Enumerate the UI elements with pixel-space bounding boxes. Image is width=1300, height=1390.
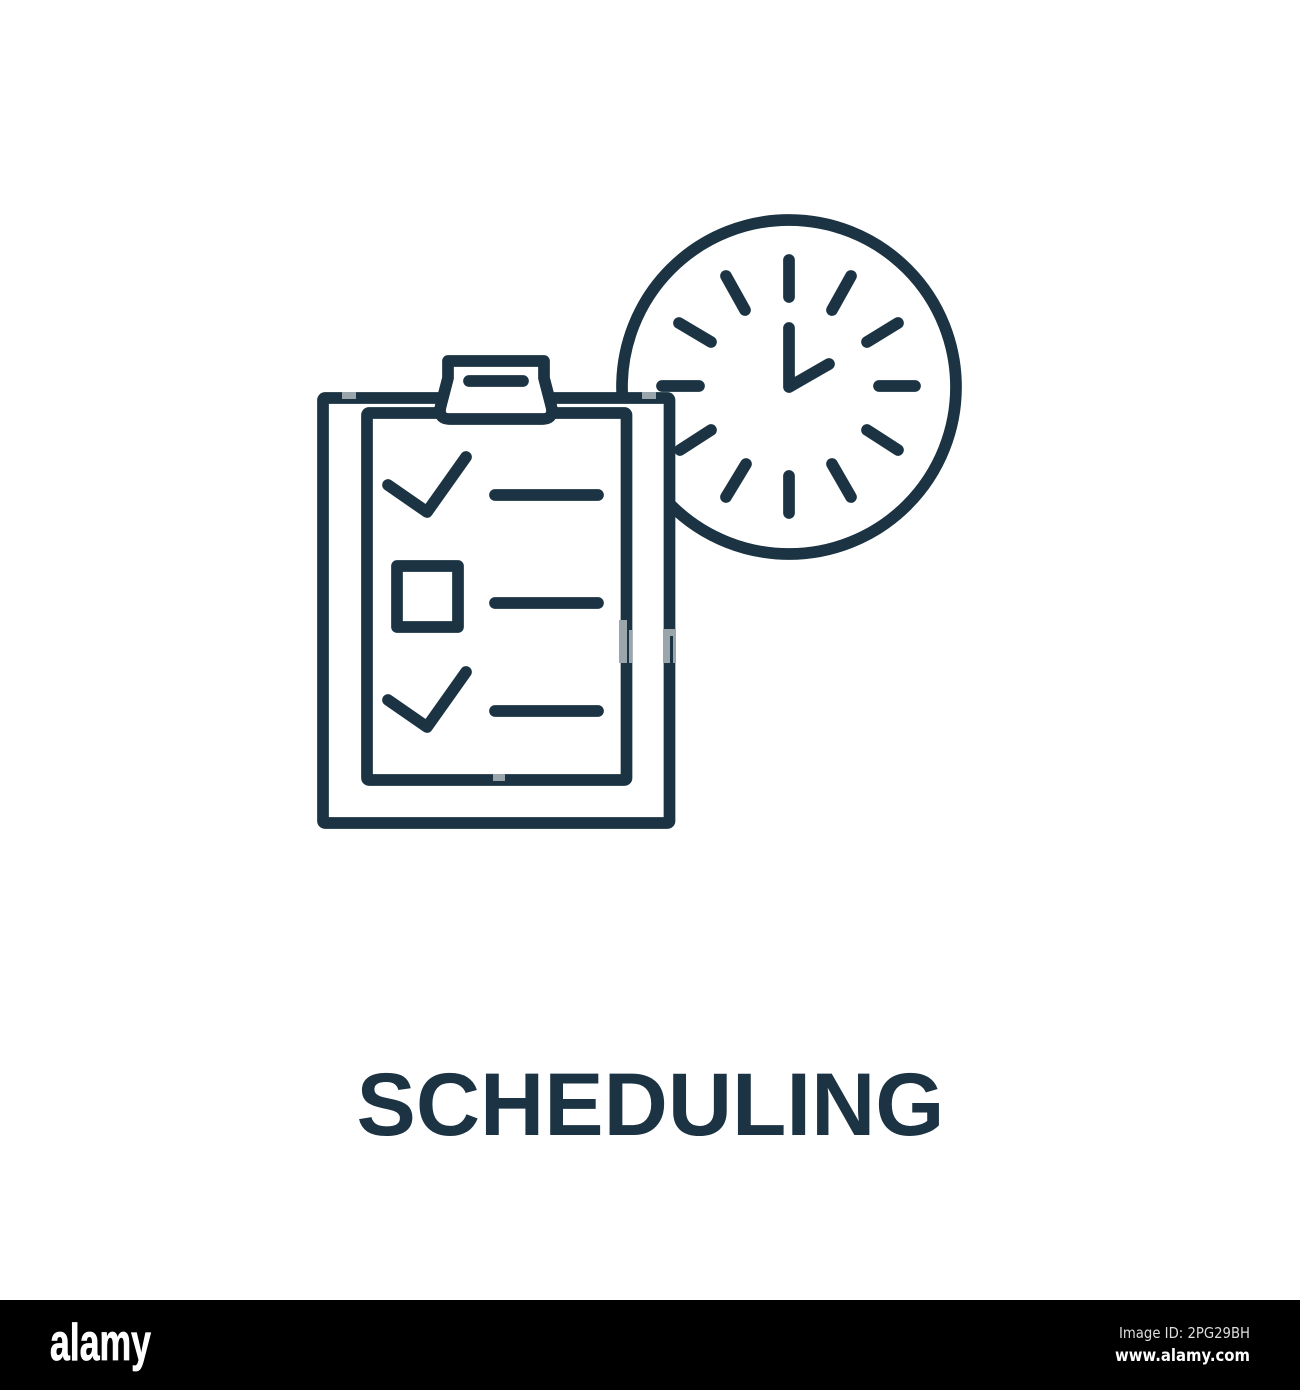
icon: checked item <box>388 457 598 512</box>
image id: Image ID: 2PG29BH <box>1119 1324 1250 1342</box>
icon: clock <box>622 220 956 554</box>
icon: clipboard <box>323 361 670 823</box>
icon: clipboard clip <box>440 361 552 419</box>
icon: scheduling clock and clipboard <box>323 220 956 823</box>
website: www.alamy.com <box>1115 1346 1250 1366</box>
icon: second checked item <box>388 672 598 727</box>
icon: unchecked item <box>397 566 598 627</box>
footer bar <box>0 1300 1300 1390</box>
title: SCHEDULING <box>356 1054 944 1154</box>
logo text: alamy <box>50 1314 151 1372</box>
